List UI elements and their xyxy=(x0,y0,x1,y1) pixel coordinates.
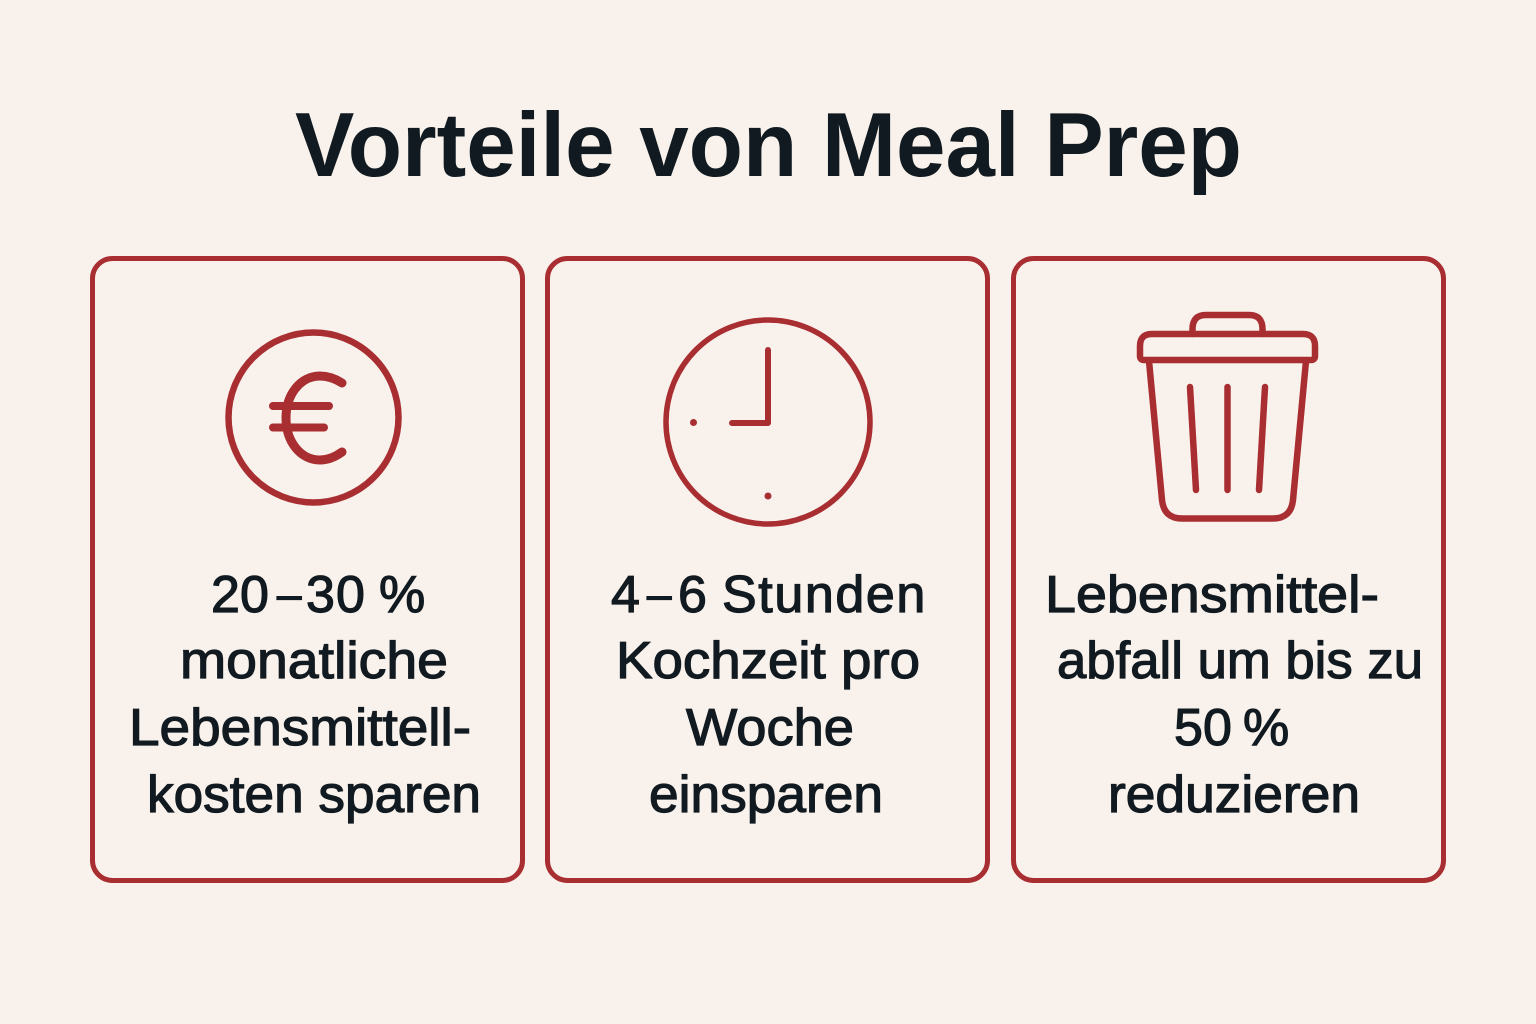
text: food waste: 50 % xyxy=(1174,699,1289,757)
text: cost savings: – xyxy=(277,570,302,619)
text: cost savings: monatliche xyxy=(180,632,448,690)
text: time savings xyxy=(611,566,927,824)
icon: clock xyxy=(666,320,870,524)
icon: trash can xyxy=(1140,315,1315,518)
text: food waste: reduzieren xyxy=(1108,766,1360,824)
card border: time savings xyxy=(548,258,988,880)
panel: time savings xyxy=(548,258,988,880)
card border: food waste xyxy=(1014,258,1444,880)
card border: cost savings xyxy=(92,258,522,880)
text: food waste: abfall um bis zu xyxy=(1057,632,1423,690)
text: time savings: einsparen xyxy=(649,766,883,824)
text: time savings: – xyxy=(647,570,673,619)
text: time savings: Kochzeit pro xyxy=(616,632,920,690)
icon: euro xyxy=(228,332,398,502)
text: food waste: Lebensmittel- xyxy=(1045,566,1379,624)
panel: food waste xyxy=(1014,258,1444,880)
text: time savings: 4 xyxy=(611,566,642,624)
panel: cost savings xyxy=(92,258,522,880)
text: time savings: Woche xyxy=(686,699,854,757)
text: cost savings: Lebensmittell- xyxy=(129,699,471,757)
text: cost savings: 30 % xyxy=(306,566,425,624)
title: Vorteile von Meal Prep xyxy=(295,95,1242,196)
text: cost savings: kosten sparen xyxy=(147,766,481,824)
text: time savings: 6 Stunden xyxy=(678,566,927,624)
text: food waste xyxy=(1045,566,1423,824)
text: cost savings: 20 xyxy=(211,566,269,624)
text: cost savings xyxy=(129,566,481,824)
